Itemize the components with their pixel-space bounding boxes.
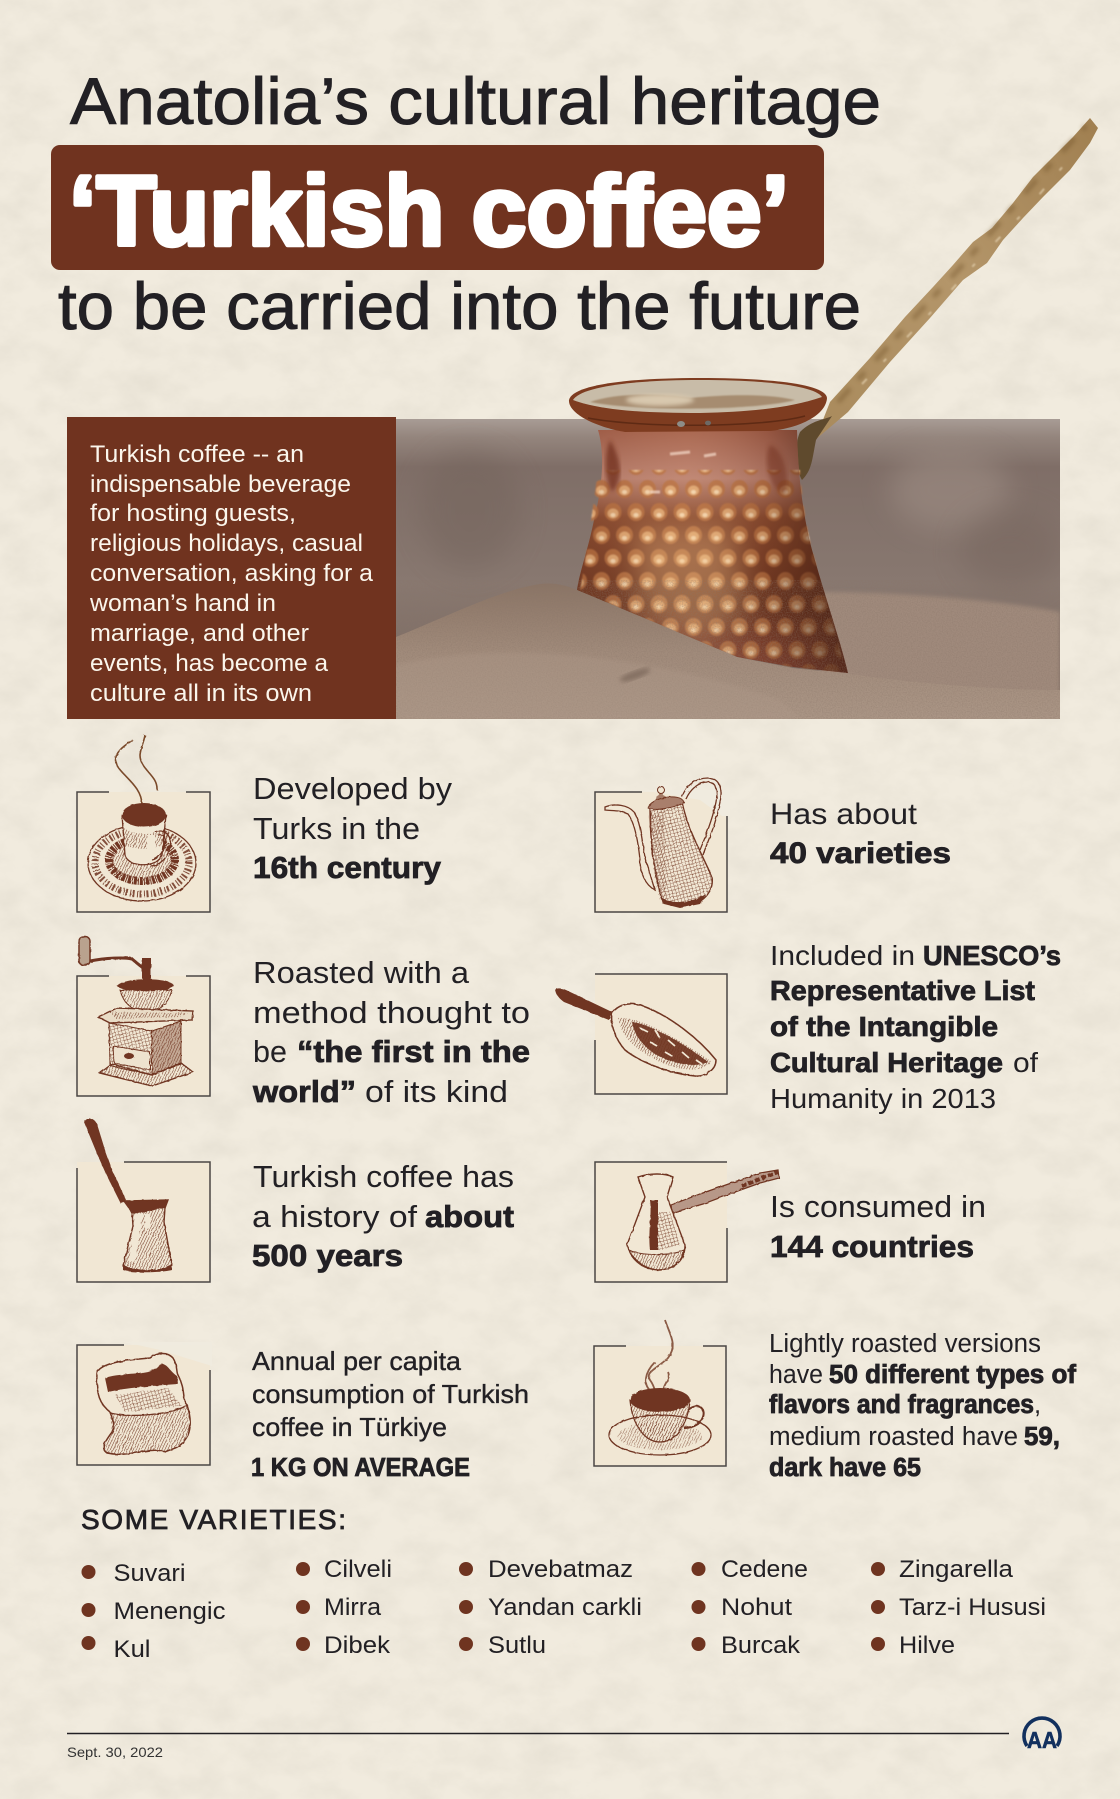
panel: intro text: for hosting guests, (90, 500, 296, 527)
varieties list column 4 (692, 1556, 808, 1659)
varieties list column 1: Menengic (114, 1598, 226, 1625)
text: varieties count: 40 varieties (770, 837, 951, 870)
text: UNESCO: Included in (770, 940, 915, 971)
heading: some varieties: SOME VARIETIES: (81, 1504, 348, 1535)
footer rule and date: Sept. 30, 2022 (67, 1744, 163, 1760)
text: countries: Is consumed in (770, 1189, 986, 1224)
icon: coffee sack (77, 1342, 212, 1465)
panel: intro text: marriage, and other (90, 620, 309, 647)
text: annual consumption: 1 KG ON AVERAGE (251, 1452, 470, 1482)
text: annual consumption: Annual per capita (252, 1346, 462, 1376)
varieties list column 1 (82, 1560, 226, 1663)
text: countries: 144 countries (770, 1229, 974, 1264)
varieties list column 2: Dibek (324, 1632, 391, 1659)
title line 3: to be carried into the future (58, 269, 861, 343)
varieties list column 5 (871, 1556, 1046, 1659)
sand foreground (396, 580, 1060, 719)
text: flavors: flavors and fragrances (769, 1391, 1034, 1419)
text: UNESCO: UNESCO’s (923, 940, 1061, 971)
text: UNESCO (770, 940, 1061, 1114)
text: flavors: 50 different types of (829, 1361, 1077, 1389)
text: developed (253, 771, 453, 885)
varieties list column 5: Zingarella (899, 1556, 1013, 1583)
icon: AA agency logo (1024, 1718, 1060, 1753)
text: roasted: method thought to (253, 995, 530, 1030)
text: countries (770, 1189, 986, 1264)
panel: intro text: culture all in its own (90, 680, 312, 707)
text: developed: Turks in the (253, 811, 420, 846)
text: UNESCO: Humanity in 2013 (770, 1083, 996, 1114)
text: flavors: medium roasted have (769, 1423, 1018, 1451)
varieties list column 2 (296, 1556, 392, 1659)
text: roasted: Roasted with a (253, 955, 470, 990)
varieties list column 3 (459, 1556, 642, 1659)
varieties list column 1: Suvari (114, 1560, 186, 1587)
varieties list column 1: Kul (114, 1636, 150, 1663)
varieties list column 5: Tarz-i Hususi (899, 1594, 1046, 1621)
title highlight banner: ‘Turkish coffee’ (69, 155, 789, 266)
text: flavors: have (769, 1361, 823, 1389)
text: UNESCO: of the Intangible (770, 1011, 998, 1042)
text: annual consumption (251, 1346, 529, 1482)
text: UNESCO: Representative List (770, 975, 1035, 1006)
pot rim (569, 378, 827, 432)
varieties list column 4: Cedene (721, 1556, 808, 1583)
varieties list column 3: Yandan carkli (488, 1594, 642, 1621)
icon: coffee scoop (556, 974, 727, 1094)
text: history (252, 1159, 514, 1273)
icon: steaming coffee cup (594, 1320, 726, 1466)
text: flavors: dark have 65 (769, 1454, 921, 1482)
pot handle (815, 118, 1098, 440)
text: developed: Developed by (253, 771, 453, 806)
text: history: 500 years (252, 1238, 403, 1273)
varieties list column 3: Devebatmaz (488, 1556, 633, 1583)
text: roasted: of its kind (365, 1074, 508, 1109)
varieties list column 2: Cilveli (324, 1556, 392, 1583)
text: annual consumption: consumption of Turkish (252, 1379, 529, 1409)
text: developed: 16th century (253, 850, 442, 885)
text: roasted: be (253, 1034, 287, 1069)
text: roasted: world” (252, 1074, 356, 1109)
panel: intro text: Turkish coffee -- an (90, 441, 304, 468)
icon: cup on ornate saucer (77, 735, 210, 912)
text: roasted (252, 955, 530, 1109)
text: history: about (425, 1199, 514, 1234)
text: annual consumption: coffee in Türkiye (252, 1412, 447, 1442)
text: history: Turkish coffee has (253, 1159, 514, 1194)
icon: cezve with long handle (595, 1162, 779, 1282)
icon: long-spout coffee pot (595, 778, 730, 912)
text: flavors: Lightly roasted versions (769, 1330, 1041, 1358)
text: varieties count: Has about (770, 798, 918, 831)
panel: intro text: conversation, asking for a (90, 560, 373, 587)
text: flavors: , (1034, 1391, 1041, 1419)
text: history: a history of (252, 1199, 417, 1234)
icon: AA agency logo: AA (1027, 1727, 1057, 1753)
varieties list column 4: Burcak (721, 1632, 801, 1659)
text: flavors: 59, (1024, 1423, 1060, 1451)
title line 1: Anatolia’s cultural heritage (70, 64, 881, 138)
panel: intro text: religious holidays, casual (90, 530, 363, 557)
icon: small cezve (77, 1118, 210, 1282)
panel: intro text (67, 417, 396, 719)
text: flavors (769, 1330, 1077, 1482)
panel: intro text: events, has become a (90, 650, 328, 677)
pot body (577, 430, 848, 673)
varieties list column 4: Nohut (721, 1594, 792, 1621)
text: UNESCO: Cultural Heritage (770, 1047, 1003, 1078)
text: varieties count (770, 798, 951, 870)
text: roasted: “the first in the (297, 1034, 530, 1069)
panel: intro text: indispensable beverage (90, 471, 351, 498)
text: UNESCO: of (1013, 1047, 1038, 1078)
varieties list column 5: Hilve (899, 1632, 955, 1659)
panel: intro text: woman’s hand in (89, 590, 276, 617)
varieties list column 3: Sutlu (488, 1632, 546, 1659)
hero photo: coffee pot in sand (396, 118, 1098, 719)
varieties list column 2: Mirra (324, 1594, 381, 1621)
icon: coffee grinder (77, 937, 210, 1096)
